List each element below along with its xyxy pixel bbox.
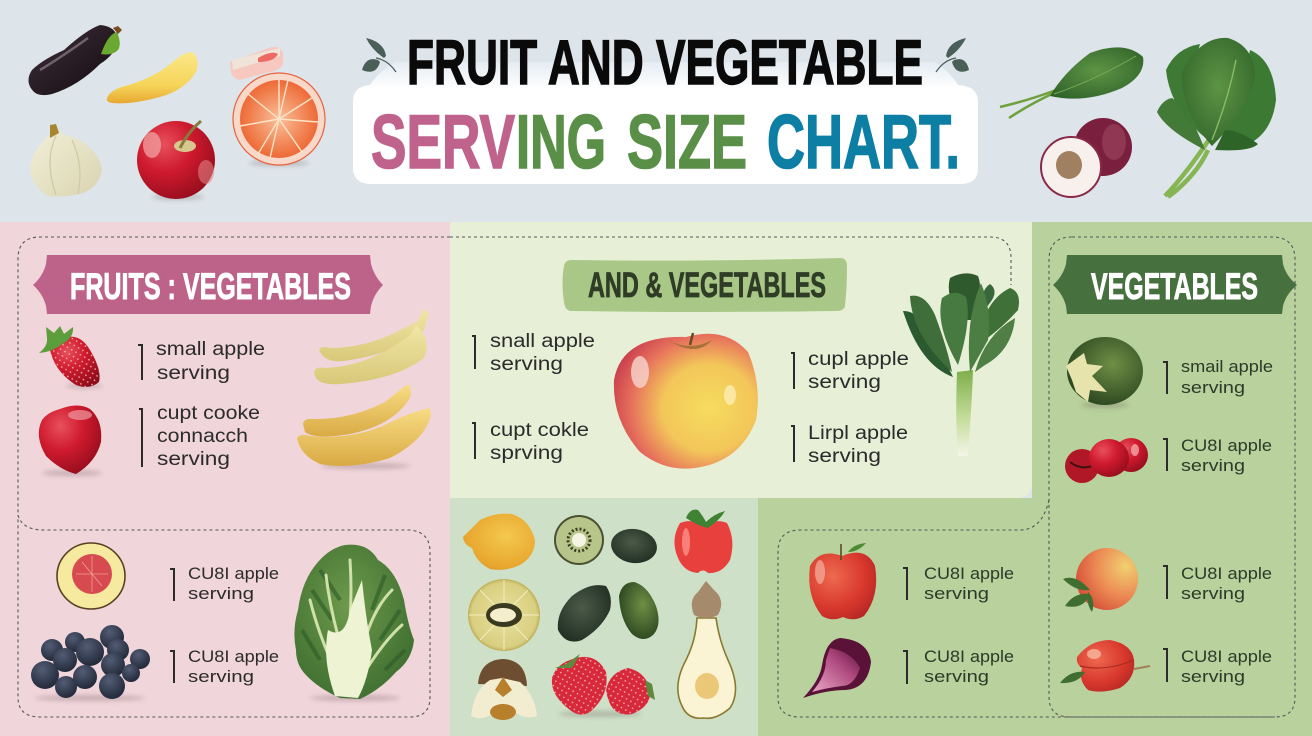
- icon: lemon: [463, 514, 535, 570]
- icon: left leaves: [362, 38, 396, 72]
- text: lower middle two: CU8I apple: [924, 647, 1014, 666]
- bar: [1163, 648, 1168, 682]
- bar: [170, 568, 175, 601]
- title line two: SERV: [371, 100, 515, 185]
- panel: fruits background: [0, 222, 450, 736]
- icon: kiwi slice: [468, 579, 540, 651]
- icon: orange slice with pink piece: [230, 47, 325, 166]
- text: small apple serving: small apple: [156, 339, 265, 360]
- text: center four: Lirpl apple: [808, 423, 908, 444]
- icon: kiwi half: [554, 515, 604, 565]
- text: lower left one: serving: [188, 584, 254, 603]
- header band: [0, 0, 1312, 222]
- dashed outline: fruits and center section: [18, 237, 1011, 515]
- title line two: SIZE: [627, 100, 747, 185]
- icon: mushroom: [471, 659, 537, 720]
- icon: radicchio: [803, 638, 871, 698]
- icon: large apple: [614, 333, 758, 469]
- banner: and vegetables: [562, 258, 847, 312]
- icon: eggplant: [28, 25, 122, 95]
- icon: strawberries: [552, 654, 655, 717]
- text: right one: serving: [1181, 378, 1245, 397]
- icon: grapefruit slice: [57, 543, 125, 609]
- text: right one: smail apple: [1181, 357, 1273, 376]
- text: lower middle one: [903, 564, 1014, 603]
- text: right three: [1163, 564, 1272, 603]
- icon: peach: [1063, 548, 1138, 612]
- text: cup cooke serving: [139, 403, 260, 470]
- icon: yellow banana: [107, 52, 198, 103]
- text: center one: serving: [490, 354, 563, 375]
- dashed outline: lower right section: [778, 500, 1275, 717]
- icon: spinach bunch: [1157, 38, 1276, 197]
- text: lower left two: serving: [188, 667, 254, 686]
- icon: blueberries: [31, 625, 150, 701]
- text: lower middle one: CU8I apple: [924, 564, 1014, 583]
- bar: [472, 335, 476, 369]
- title line two: CHART.: [767, 100, 960, 185]
- bar: [1163, 565, 1168, 599]
- banner text: FRUITS : VEGETABLES: [70, 266, 351, 307]
- text: small apple serving: serving: [157, 363, 230, 384]
- title line one: FRUIT AND VEGETABLE: [407, 28, 923, 98]
- bar: [791, 352, 795, 389]
- icon: red pepper: [674, 510, 732, 573]
- bar: [791, 425, 795, 462]
- icon: lettuce: [294, 545, 414, 701]
- text: cup cooke serving: cupt cooke: [157, 403, 260, 424]
- panel: and vegetables background: [450, 222, 1032, 498]
- bar: [1163, 361, 1168, 394]
- text: center four: [791, 423, 908, 467]
- text: center two: cupt cokle: [490, 420, 589, 441]
- banner text: AND & VEGETABLES: [588, 266, 826, 305]
- text: lower middle one: serving: [924, 584, 989, 603]
- text: right one: [1163, 357, 1273, 397]
- bar: [903, 650, 908, 684]
- panel: mixed vegetables lower background: [450, 498, 758, 736]
- text: lower middle two: [903, 647, 1014, 686]
- text: center four: serving: [808, 446, 881, 467]
- banner: fruits: [33, 255, 383, 314]
- banner: vegetables: [1053, 255, 1297, 314]
- text: lower middle two: serving: [924, 667, 989, 686]
- icon: pear half: [678, 581, 736, 718]
- icon: yellow bananas: [297, 385, 431, 469]
- dashed outline: right vegetables section: [1049, 237, 1295, 717]
- text: right two: CU8I apple: [1181, 436, 1272, 455]
- text: cup cooke serving: connacch: [157, 426, 248, 447]
- icon: plum halves: [1041, 118, 1132, 197]
- bar: [139, 408, 143, 467]
- title line two: ING: [516, 100, 606, 185]
- icon: small avocado: [609, 526, 659, 566]
- text: center one: snall apple: [490, 331, 595, 352]
- text: lower left two: CU8I apple: [188, 647, 279, 666]
- icon: red fruit: [39, 406, 102, 476]
- icon: onion: [30, 124, 102, 197]
- text: center three: serving: [808, 372, 881, 393]
- text: center three: [791, 349, 909, 393]
- title plate: [353, 62, 978, 184]
- dashed outline: lower left section: [18, 515, 430, 717]
- icon: lower apple: [809, 543, 876, 619]
- text: lower left two: [170, 647, 279, 686]
- text: right two: [1163, 436, 1272, 475]
- icon: right leaves: [936, 38, 969, 72]
- text: cup cooke serving: serving: [157, 449, 230, 470]
- text: right four: CU8I apple: [1181, 647, 1272, 666]
- bar: [138, 344, 143, 380]
- text: lower left one: CU8I apple: [188, 564, 279, 583]
- bar: [1163, 438, 1168, 471]
- bar: [472, 422, 476, 459]
- icon: red cherries: [1065, 438, 1148, 483]
- icon: spinach leaf: [1000, 47, 1143, 118]
- panel: vegetables background: [758, 222, 1312, 736]
- text: center one: [472, 331, 595, 375]
- text: center two: sprving: [490, 443, 563, 464]
- title line two: [371, 100, 960, 185]
- text: right two: serving: [1181, 456, 1245, 475]
- text: right four: serving: [1181, 667, 1245, 686]
- icon: strawberry: [39, 326, 102, 388]
- icon: bok choy: [903, 273, 1019, 456]
- text: small apple serving: [138, 339, 265, 384]
- title block: [353, 28, 978, 185]
- bar: [170, 650, 175, 683]
- icon: avocado left: [558, 585, 611, 642]
- icon: avocado right: [619, 582, 659, 639]
- text: lower left one: [170, 564, 279, 603]
- text: center two: [472, 420, 589, 464]
- text: right three: serving: [1181, 584, 1245, 603]
- text: right four: [1163, 647, 1272, 686]
- icon: red apple: [137, 121, 215, 200]
- text: center three: cupl apple: [808, 349, 909, 370]
- text: right three: CU8I apple: [1181, 564, 1272, 583]
- icon: red pepper small: [1060, 640, 1150, 692]
- icon: pale bananas: [314, 309, 429, 384]
- icon: green fruit: [1066, 337, 1143, 408]
- bar: [903, 567, 908, 600]
